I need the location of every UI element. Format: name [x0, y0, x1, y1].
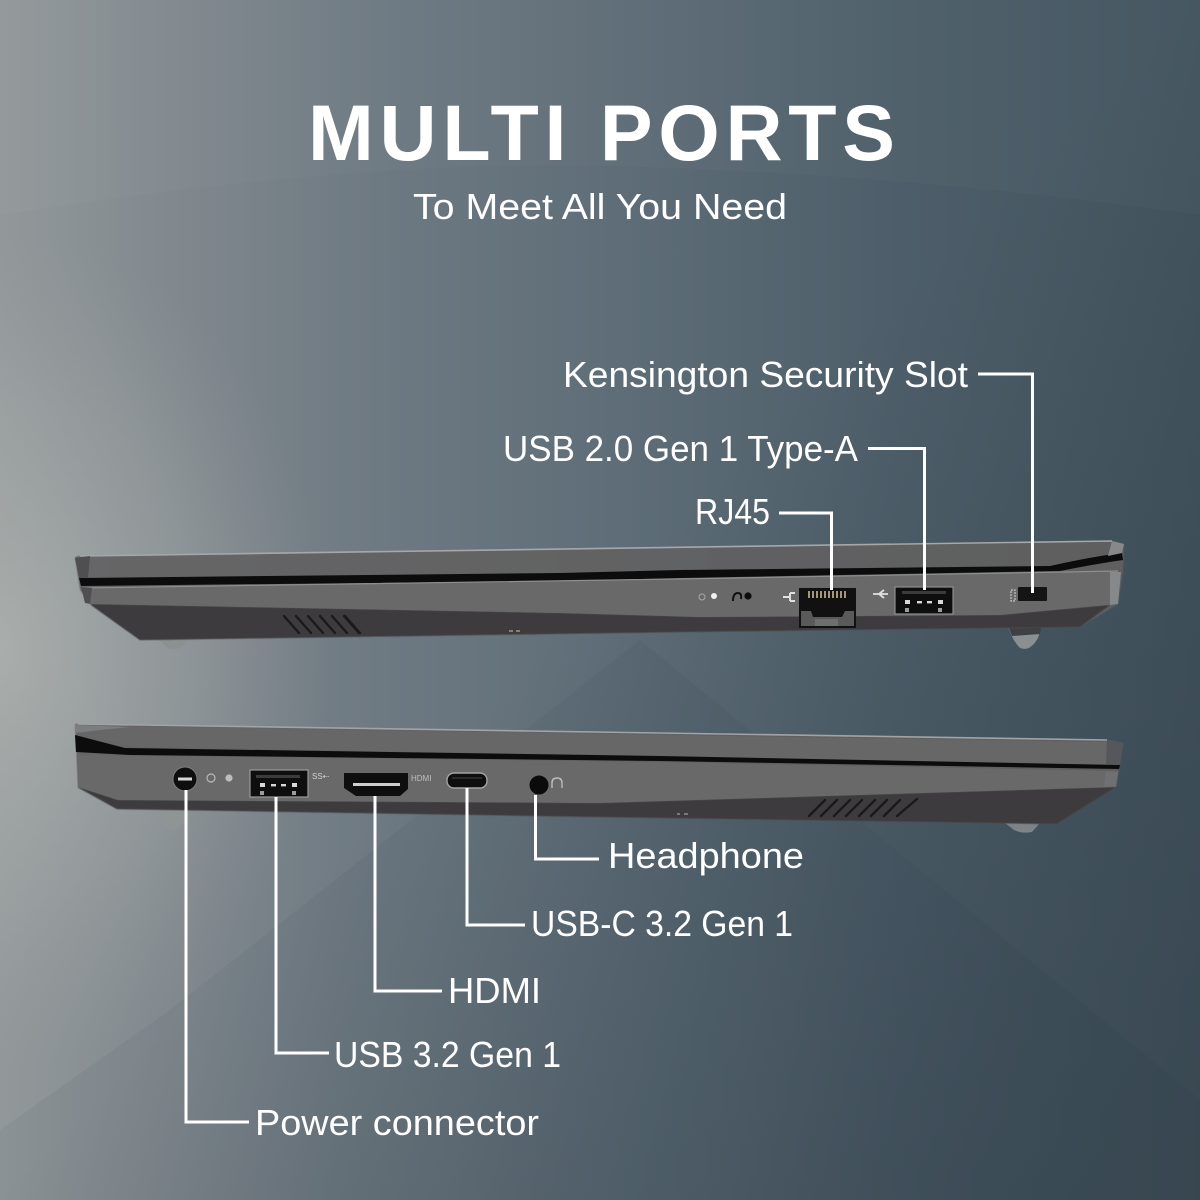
laptop: left side view: [75, 724, 1123, 833]
left corner highlight: [75, 725, 130, 733]
callout: Headphone: [536, 795, 804, 876]
left corner: [75, 556, 90, 578]
laptop: right side view: [75, 541, 1124, 649]
subtitle: To Meet All You Need: [413, 186, 787, 227]
port: USB-C: [447, 773, 487, 788]
base lip: [84, 571, 1118, 617]
callout: Power connector: Power connector: [255, 1102, 539, 1143]
port: USB 2.0: [895, 587, 953, 614]
rubber foot right: [1008, 624, 1042, 649]
callout: HDMI: HDMI: [448, 970, 541, 1011]
seam: [75, 735, 1120, 769]
front wedge dark band: [90, 604, 1110, 640]
callout: Power connector: [186, 790, 539, 1143]
port: headphone jack: [529, 775, 549, 795]
lower dark band: [78, 787, 1116, 824]
body: [77, 755, 1118, 803]
callout: USB-C 3.2 Gen 1: USB-C 3.2 Gen 1: [531, 903, 793, 944]
speaker grille: [809, 799, 917, 816]
callout: HDMI: [375, 796, 541, 1011]
port: RJ45: [799, 588, 856, 628]
callout: USB 3.2 Gen 1: USB 3.2 Gen 1: [334, 1034, 561, 1075]
icon: USB symbol: [873, 590, 888, 598]
top edge highlight: [80, 541, 1112, 556]
top edge highlight: [78, 724, 1107, 740]
speaker grille: [284, 616, 360, 633]
HDMI label: HDMI: [411, 774, 431, 783]
chassis: [75, 724, 1123, 824]
port: power connector: [173, 767, 197, 791]
callout: USB 2.0 Gen 1 Type-A: [503, 428, 924, 590]
power status: [207, 774, 233, 782]
icon: ethernet: [783, 593, 795, 601]
icon: SS USB label: SS⇠: [312, 772, 330, 781]
callout: Kensington Security Slot: Kensington Security Slot: [563, 354, 968, 395]
bottom mark: [677, 813, 688, 815]
callout: Headphone: Headphone: [608, 835, 804, 876]
port: security slot: [1018, 587, 1047, 601]
bottom mark: [509, 630, 520, 632]
icon: headset: [552, 778, 562, 788]
callout: RJ45: [695, 491, 832, 590]
port: USB 3.2: [250, 770, 308, 797]
callout: USB-C 3.2 Gen 1: [467, 788, 793, 944]
rubber foot left: [155, 808, 186, 830]
right corner: [1108, 541, 1124, 556]
callout: RJ45: RJ45: [695, 491, 770, 532]
callout: USB 2.0 Gen 1 Type-A: USB 2.0 Gen 1 Type-A: [503, 428, 859, 469]
right corner: [1106, 740, 1123, 765]
seam: [79, 553, 1123, 586]
status indicators: [699, 592, 752, 601]
callout: Kensington Security Slot: [563, 354, 1032, 593]
icon: lock label: [1011, 590, 1015, 601]
title: MULTI PORTS: [308, 88, 895, 177]
chassis: [75, 541, 1124, 640]
port: HDMI: [344, 773, 408, 796]
callout: USB 3.2 Gen 1: [276, 797, 561, 1075]
rubber foot left: [155, 636, 192, 649]
